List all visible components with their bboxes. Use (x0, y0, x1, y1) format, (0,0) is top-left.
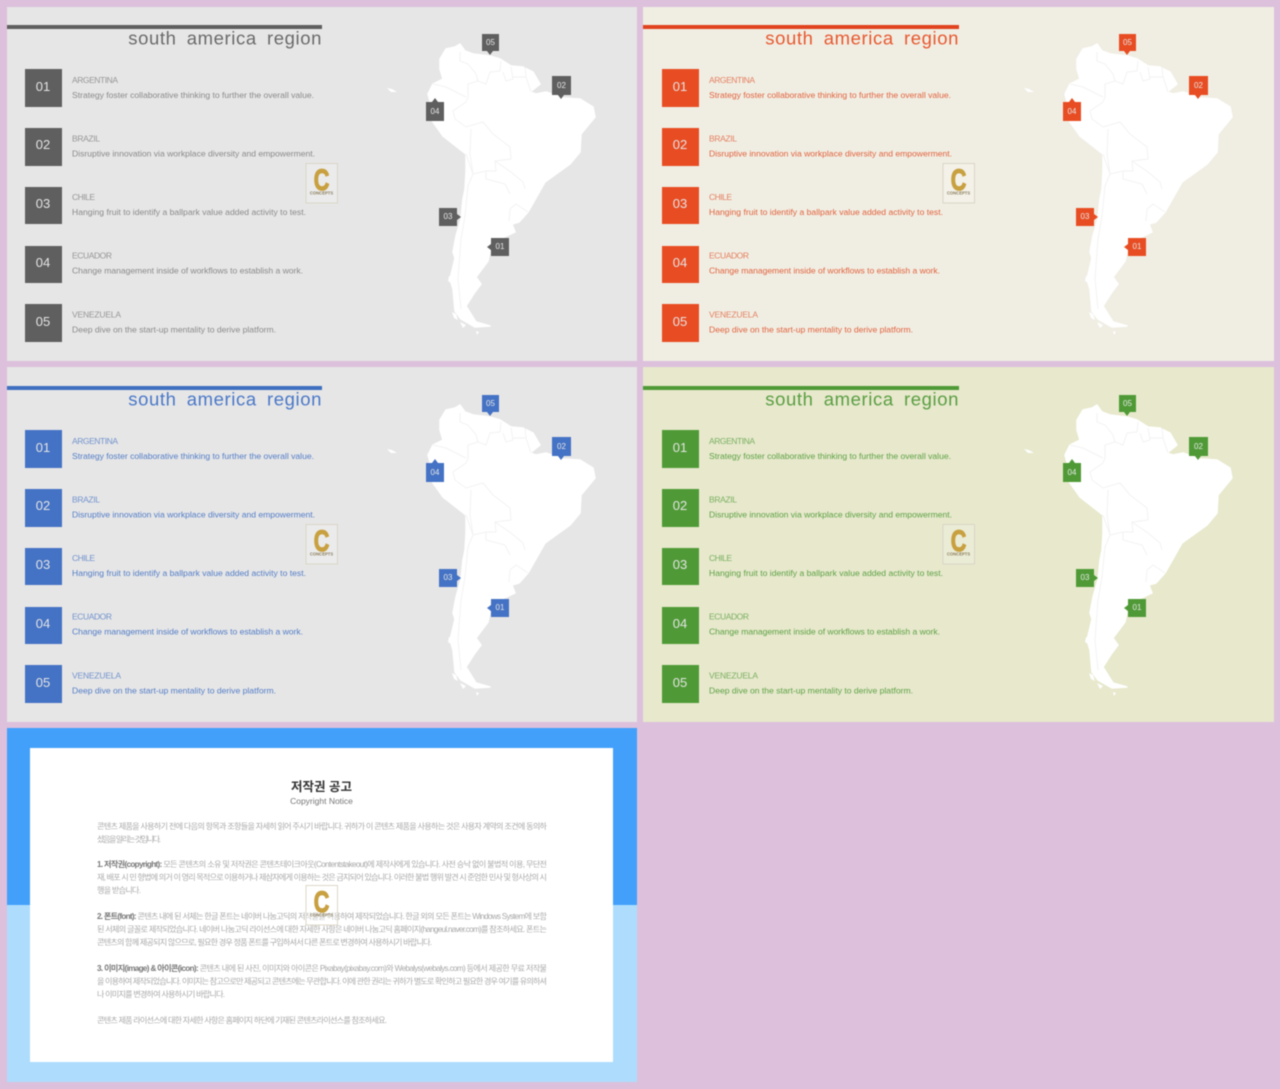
list items: red: 05 (673, 314, 687, 329)
map: south america green (1024, 405, 1232, 696)
logo: blue slide (306, 523, 338, 564)
list item 03 (25, 187, 306, 224)
map pins: red: 01 (1133, 242, 1142, 251)
list items: blue: CHILE (72, 553, 95, 563)
list items: green: 01 (673, 440, 687, 455)
map pins: red: 03 (1081, 212, 1090, 221)
logo: red slide (943, 162, 974, 203)
notice body text: 된 서체의 글꼴로 제작되었습니다. 네이버 나눔고딕 라이선스에 대한 자세한 사항은 네이버 나눔고딕 홈페이지(hangeul.naver.com)를 참조하세요. 폰트는 (97, 924, 548, 934)
list items: blue: 01 (36, 440, 50, 455)
notice body text: 2. 폰트(font): 콘텐츠 내에 된 서체는 한글 폰트는 네이버 나눔고딕의 저작물을 이용하여 제작되었습니다. 한글 외의 모든 폰트는 Windows System에 보함 (97, 911, 548, 921)
panel: blue slide (7, 367, 637, 722)
logo: grey slide: C (314, 162, 329, 197)
notice title: 저작권 공고 (291, 779, 352, 794)
list items: green: Deep dive on the start-up mentality to derive platform. (709, 686, 913, 696)
list items: blue: 03 (36, 557, 50, 572)
list items: red: 01 (673, 79, 687, 94)
list items: red: ECUADOR (709, 250, 749, 260)
list item 02: 02 (36, 137, 50, 152)
list items: red: Deep dive on the start-up mentality to derive platform. (709, 324, 913, 334)
title: green: south america region (765, 388, 959, 410)
list items: blue: Strategy foster collaborative thinking to further the overall value. (72, 451, 314, 461)
list items: green (662, 430, 952, 703)
list items: red (662, 69, 952, 342)
list items: green: Disruptive innovation via workplace diversity and empowerment. (709, 510, 952, 520)
logo: red slide: C (951, 162, 966, 197)
map pins: grey: 04 (431, 107, 440, 116)
list item 03: 03 (36, 196, 50, 211)
map pins: blue (426, 395, 571, 617)
map pins: green: 02 (1194, 442, 1203, 451)
map pins: red (1063, 34, 1208, 256)
notice card (30, 748, 613, 1062)
list items: blue (25, 430, 315, 703)
logo: red slide: CONCEPTS (947, 190, 970, 196)
notice body text (97, 821, 548, 1025)
list items: green: BRAZIL (709, 494, 737, 504)
list items: red: Disruptive innovation via workplace diversity and empowerment. (709, 148, 952, 158)
map pins: blue: 03 (444, 573, 453, 582)
list item 01: Strategy foster collaborative thinking to further the overall value. (72, 90, 314, 100)
map pins: red: 05 (1123, 38, 1132, 47)
notice body text: 1. 저작권(copyright): 모든 콘텐츠의 소유 및 저작권은 콘텐츠테이크아웃(Contentstakeout)에 제작사에게 있습니다. 사전 승낙 없이 불법적 이용, 무단전 (97, 859, 547, 869)
list items: green: 02 (673, 498, 687, 513)
notice body text: 콘텐츠 제품 라이선스에 대한 자세한 사항은 홈페이지 하단에 기재된 콘텐츠라이선스를 참조하세요. (97, 1015, 387, 1025)
map pins: blue: 01 (496, 603, 505, 612)
map pins: grey (426, 34, 571, 256)
list item 02: BRAZIL (72, 134, 100, 144)
title: red: south america region (765, 28, 959, 48)
list items: blue: ECUADOR (72, 612, 112, 622)
list items: red: Strategy foster collaborative thinking to further the overall value. (709, 90, 951, 100)
map pins: grey: 02 (557, 81, 566, 90)
list items: red: VENEZUELA (709, 310, 758, 320)
notice body text: 나 이미지를 변경하여 사용하시기 바랍니다. (97, 989, 225, 999)
list item 05: Deep dive on the start-up mentality to derive platform. (72, 324, 276, 334)
panel: red slide (643, 7, 1274, 361)
notice body text: 행을 받습니다. (97, 885, 141, 895)
notice body text: 콘텐츠 제품을 사용하기 전에 다음의 항목과 조항들을 자세히 읽어 주시기 바랍니다. 귀하가 이 콘텐츠 제품을 사용하는 것은 사용자 계약의 조건에 동의하 (97, 821, 548, 831)
list items: blue: BRAZIL (72, 494, 100, 504)
logo: grey slide (306, 162, 338, 203)
title: blue: south america region (128, 388, 322, 410)
list item 05: VENEZUELA (72, 310, 121, 320)
logo: grey slide: CONCEPTS (310, 190, 333, 196)
map pins: red: 02 (1194, 81, 1203, 90)
list items: blue: 05 (36, 675, 50, 690)
map pins: red: 04 (1068, 107, 1077, 116)
list item 03: CHILE (72, 192, 95, 202)
list items: red: 04 (673, 255, 687, 270)
map pins: green: 01 (1133, 603, 1142, 612)
map pins: blue: 04 (431, 468, 440, 477)
map pins: green (1063, 395, 1208, 617)
list item 04 (25, 246, 303, 283)
title: grey: south america region (128, 28, 322, 48)
logo: notice (306, 884, 338, 925)
map: south america blue (387, 405, 595, 696)
list items: green: Change management inside of workflows to establish a work. (709, 626, 940, 636)
list items: green: Strategy foster collaborative thinking to further the overall value. (709, 451, 951, 461)
map pins: green: 04 (1068, 468, 1077, 477)
logo: green slide (943, 523, 974, 564)
logo: notice: CONCEPTS (310, 912, 333, 918)
map pins: green: 05 (1123, 399, 1132, 408)
list items: blue: Change management inside of workflows to establish a work. (72, 626, 303, 636)
logo: notice: C (314, 884, 329, 919)
notice body text: 셨음을 알리는 것입니다. (97, 834, 161, 844)
list items: green: ECUADOR (709, 612, 749, 622)
map pins: green: 03 (1081, 573, 1090, 582)
notice body text: 콘텐츠의 함께 제공되지 않으므로, 필요한 경우 정품 폰트를 구입하셔서 다른 폰트로 변경하여 사용하시기 바랍니다. (97, 937, 432, 947)
list items: red: Change management inside of workflows to establish a work. (709, 266, 940, 276)
heading bar: red (643, 25, 959, 29)
list item 05 (25, 304, 276, 342)
list item 02 (25, 128, 315, 166)
map: south america grey (387, 44, 595, 335)
notice body text: 재, 배포 시 민 형법에 의거 이 영리 목적으로 이용하거나 제삼자에게 이용하는 것은 금지되어 있습니다. 이러한 불법 행위 발견 시 준엄한 민사 및 형사상의 시 (97, 872, 547, 882)
logo: blue slide: CONCEPTS (310, 552, 333, 556)
list item 01: ARGENTINA (72, 75, 118, 85)
list item 04: ECUADOR (72, 250, 112, 260)
list items: green: ARGENTINA (709, 436, 755, 446)
list item 04: Change management inside of workflows to establish a work. (72, 266, 303, 276)
map pins: grey: 05 (486, 38, 495, 47)
list item 02: Disruptive innovation via workplace diversity and empowerment. (72, 148, 315, 158)
list items: green: Hanging fruit to identify a ballpark value added activity to test. (709, 568, 943, 578)
list items: blue: 02 (36, 498, 50, 513)
list items: blue: Deep dive on the start-up mentality to derive platform. (72, 686, 276, 696)
list items: green: VENEZUELA (709, 670, 758, 680)
list items: green: 03 (673, 557, 687, 572)
list items: red: ARGENTINA (709, 75, 755, 85)
list item 03: Hanging fruit to identify a ballpark value added activity to test. (72, 207, 306, 217)
list items: red: BRAZIL (709, 134, 737, 144)
notice subtitle: Copyright Notice (290, 796, 353, 806)
panel: grey slide (7, 7, 637, 361)
list items: red: 03 (673, 196, 687, 211)
list items: red: Hanging fruit to identify a ballpark value added activity to test. (709, 207, 943, 217)
list items: red: 02 (673, 137, 687, 152)
map pins: blue: 05 (486, 399, 495, 408)
list items: green: CHILE (709, 553, 732, 563)
panel: green slide (643, 367, 1274, 722)
heading bar: green (643, 386, 959, 390)
heading bar: blue (7, 386, 322, 390)
map pins: grey: 03 (444, 212, 453, 221)
map pins: grey: 01 (496, 242, 505, 251)
list items: blue: Disruptive innovation via workplace diversity and empowerment. (72, 510, 315, 520)
map pins: blue: 02 (557, 442, 566, 451)
logo: green slide: CONCEPTS (947, 552, 970, 556)
list items: blue: VENEZUELA (72, 670, 121, 680)
logo: blue slide: C (314, 523, 329, 558)
list item 05: 05 (36, 314, 50, 329)
map: south america red (1024, 44, 1232, 335)
list item 01: 01 (36, 79, 50, 94)
logo: green slide: C (951, 523, 966, 558)
list items: blue: Hanging fruit to identify a ballpark value added activity to test. (72, 568, 306, 578)
list items: red: CHILE (709, 192, 732, 202)
list items: blue: 04 (36, 616, 50, 631)
list items: blue: ARGENTINA (72, 436, 118, 446)
notice body text: 3. 이미지(image) & 아이콘(icon): 콘텐츠 내에 된 사진, 이미지와 아이콘은 Pixabay(pixabay.com)와 Webalys(webalys.com) 등에서 제공한 무료 저작물 (97, 963, 547, 973)
list items: green: 04 (673, 616, 687, 631)
notice body text: 을 이용하여 제작되었습니다. 이미지는 참고으로만 제공되고 콘텐츠에는 무관합니다. 이에 관한 권리는 귀하가 별도로 확인하고 필요한 경우 여기를 유의하셔 (97, 976, 547, 986)
panel: copyright notice (7, 728, 637, 1082)
list item 04: 04 (36, 255, 50, 270)
list items: green: 05 (673, 675, 687, 690)
list item 01 (25, 69, 314, 107)
heading bar: grey (7, 25, 322, 29)
